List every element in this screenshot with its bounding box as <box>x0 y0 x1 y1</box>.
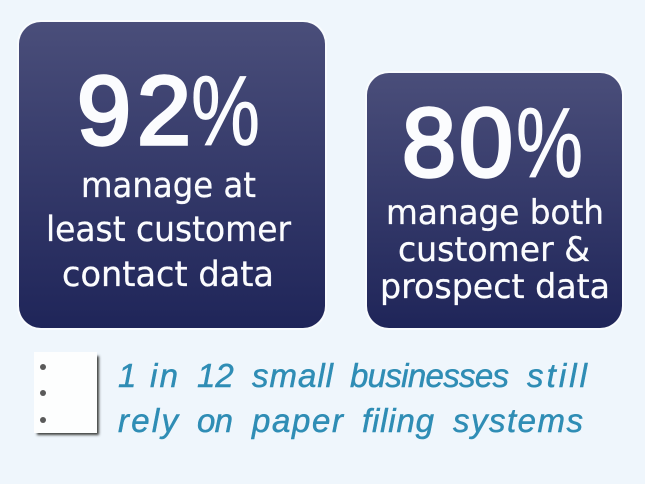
text: manage at least customer contact data: manage at <box>81 166 256 206</box>
text: manage both customer and prospect data: manage both <box>386 193 604 233</box>
text: paper filing callout: systems <box>453 402 583 439</box>
text: paper filing callout: 12 <box>197 357 234 394</box>
stat: 80% <box>402 87 583 198</box>
text: paper filing callout: still <box>527 357 589 394</box>
text: manage both customer and prospect data <box>380 193 610 307</box>
panel: 80% customer and prospect data <box>365 71 624 330</box>
text: manage both customer and prospect data: customer & <box>398 230 590 270</box>
text: paper filing callout: businesses <box>350 357 509 394</box>
stat: 80%: 0 <box>459 88 513 197</box>
text: paper filing callout <box>118 357 589 439</box>
panel: 92% customer contact data <box>17 20 327 330</box>
text: paper filing callout: on <box>197 402 233 439</box>
stat: 92% <box>77 55 260 166</box>
stat: 92%: % <box>191 55 260 166</box>
text: paper filing callout: small <box>252 357 335 394</box>
stat: 80%: % <box>516 87 583 198</box>
stat: 92%: 2 <box>137 56 191 165</box>
text: paper filing callout: 1 <box>118 357 136 394</box>
text: manage at least customer contact data: least customer <box>46 210 292 250</box>
stat: 80%: 8 <box>402 88 456 197</box>
text: paper filing callout: paper <box>251 402 345 439</box>
text: manage at least customer contact data: contact data <box>62 255 274 295</box>
text: paper filing callout: in <box>150 357 178 394</box>
text: paper filing callout: rely <box>118 402 180 439</box>
text: paper filing callout: filing <box>362 402 435 439</box>
stat: 92%: 9 <box>77 56 131 165</box>
icon: sheet of paper <box>34 352 99 435</box>
text: manage at least customer contact data <box>46 166 292 295</box>
text: manage both customer and prospect data: prospect data <box>380 267 610 307</box>
